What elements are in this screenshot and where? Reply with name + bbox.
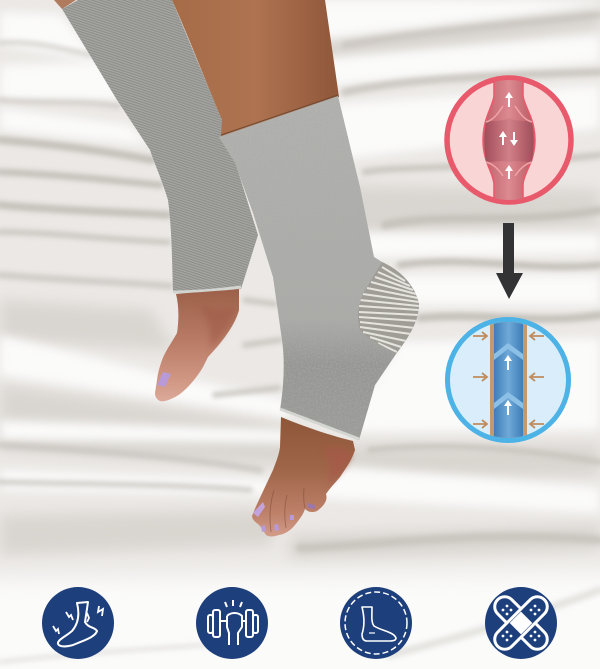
left toenail xyxy=(157,372,171,387)
upper leg skin xyxy=(172,0,339,136)
icon: foot pain xyxy=(42,587,114,659)
top hem xyxy=(221,95,338,135)
diagram: healthy vein in blue circle xyxy=(448,320,568,440)
vein body xyxy=(483,78,535,202)
bottom bright area xyxy=(0,570,600,669)
arrow: down xyxy=(496,223,523,299)
right sleeve hem xyxy=(280,409,359,439)
vein wall xyxy=(490,320,527,440)
toe lines xyxy=(270,488,305,532)
flow arrows xyxy=(499,92,518,179)
ribbed heel xyxy=(358,262,419,354)
diagram: weakened vein in red circle xyxy=(447,78,571,202)
left sleeve hem xyxy=(173,287,241,292)
skin: far leg sliver xyxy=(54,0,76,9)
left foot shading xyxy=(200,305,234,348)
upward flow arrows xyxy=(504,355,512,415)
broad highlights xyxy=(0,0,600,513)
toenails xyxy=(253,502,265,517)
blue channel xyxy=(494,320,523,440)
left leg and sock xyxy=(54,0,258,293)
icon: crossed bandages xyxy=(474,576,568,669)
icon: strength dumbbell and fist xyxy=(196,587,268,659)
right compression sleeve xyxy=(219,95,425,440)
compression arrows xyxy=(473,332,544,428)
icon: foot with dashed ring xyxy=(340,587,412,659)
left foot xyxy=(155,289,239,401)
left compression sleeve xyxy=(62,0,258,293)
right foot xyxy=(252,417,355,536)
